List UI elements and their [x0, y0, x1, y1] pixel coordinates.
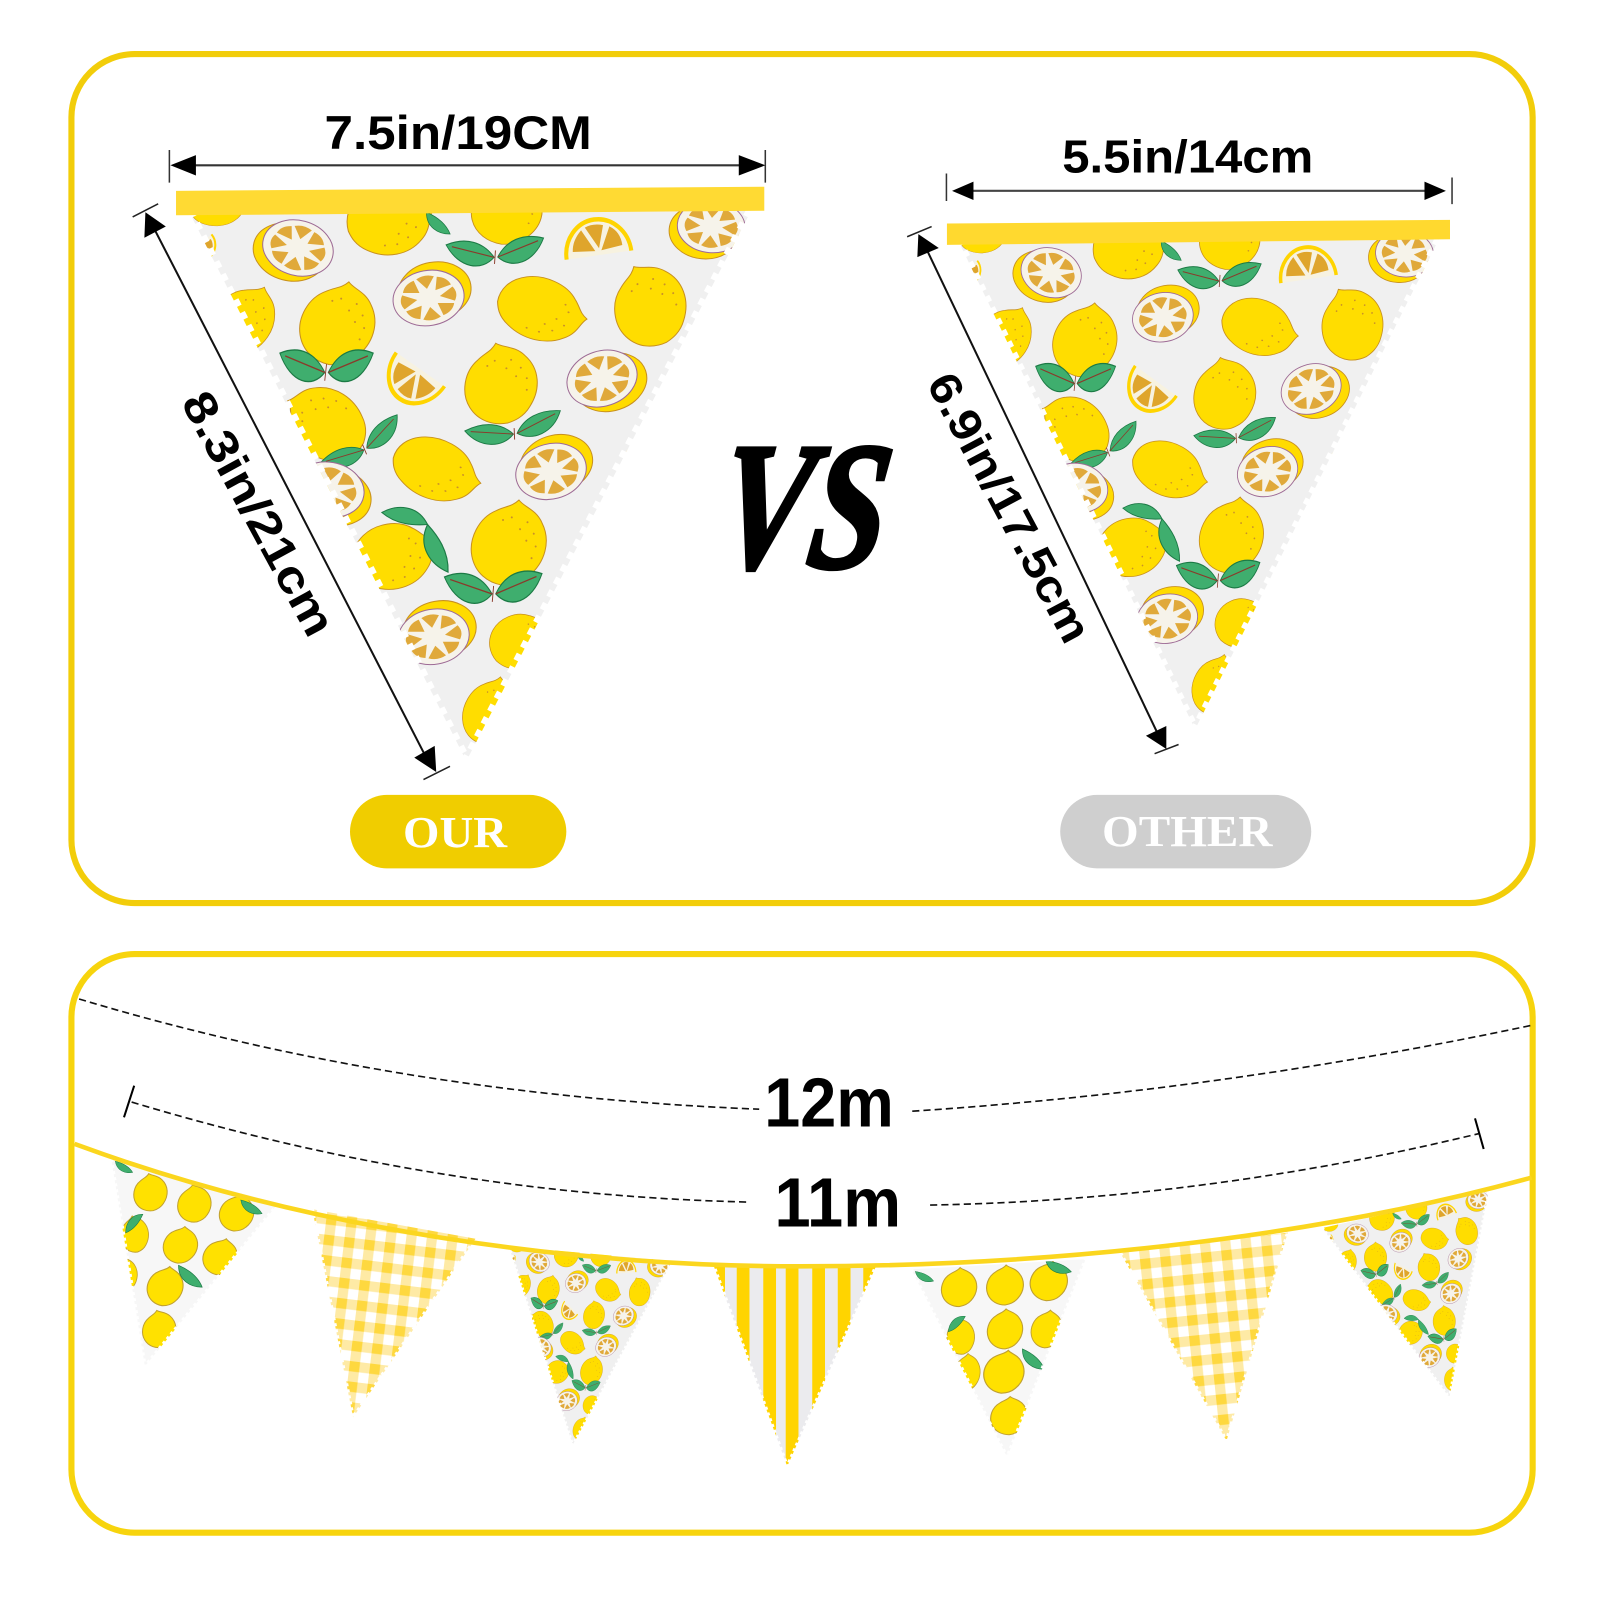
- width dimension arrow: our flag: [169, 150, 765, 183]
- bunting flags: [111, 1157, 1534, 1470]
- vs label: VS: [707, 406, 903, 607]
- badge: other: [1060, 795, 1311, 868]
- badge: our: OUR: [403, 807, 508, 857]
- width dimension arrow: other flag: [946, 173, 1452, 204]
- panel: total length: [71, 954, 1534, 1533]
- pennant: other smaller lemon flag: [947, 203, 1450, 730]
- pennant: our large lemon flag: [176, 170, 764, 761]
- flag 4: yellow stripes: [712, 1261, 876, 1470]
- height label: other flag: 6.9in/17.5cm: [917, 364, 1102, 651]
- flag 7: small lemon print: [1318, 1178, 1534, 1416]
- length label: 11m: 11m: [774, 1164, 901, 1242]
- length label: 12m: 12m: [764, 1064, 894, 1142]
- dashed line: 11m length: [124, 1086, 1484, 1205]
- width label: other flag: 5.5in/14cm: [1062, 130, 1313, 182]
- bunting string: [74, 1144, 1532, 1266]
- flag 6: yellow gingham: [1120, 1233, 1288, 1441]
- flag 1: large lemons: [115, 1160, 262, 1348]
- badge: our: [350, 795, 566, 868]
- height dimension arrow: other flag: [907, 227, 1179, 754]
- flag 5: large lemons: [915, 1261, 1072, 1436]
- height dimension arrow: our flag: [133, 204, 450, 780]
- dashed line: 12m length: [79, 999, 1531, 1111]
- badge: other: OTHER: [1102, 806, 1273, 856]
- panel: size comparison: [71, 54, 1533, 903]
- flag 2: yellow gingham: [312, 1209, 476, 1417]
- height label: our flag: 8.3in/21cm: [172, 382, 346, 645]
- flag 3: small lemon print: [492, 1232, 673, 1453]
- width label: our flag: 7.5in/19CM: [324, 107, 592, 159]
